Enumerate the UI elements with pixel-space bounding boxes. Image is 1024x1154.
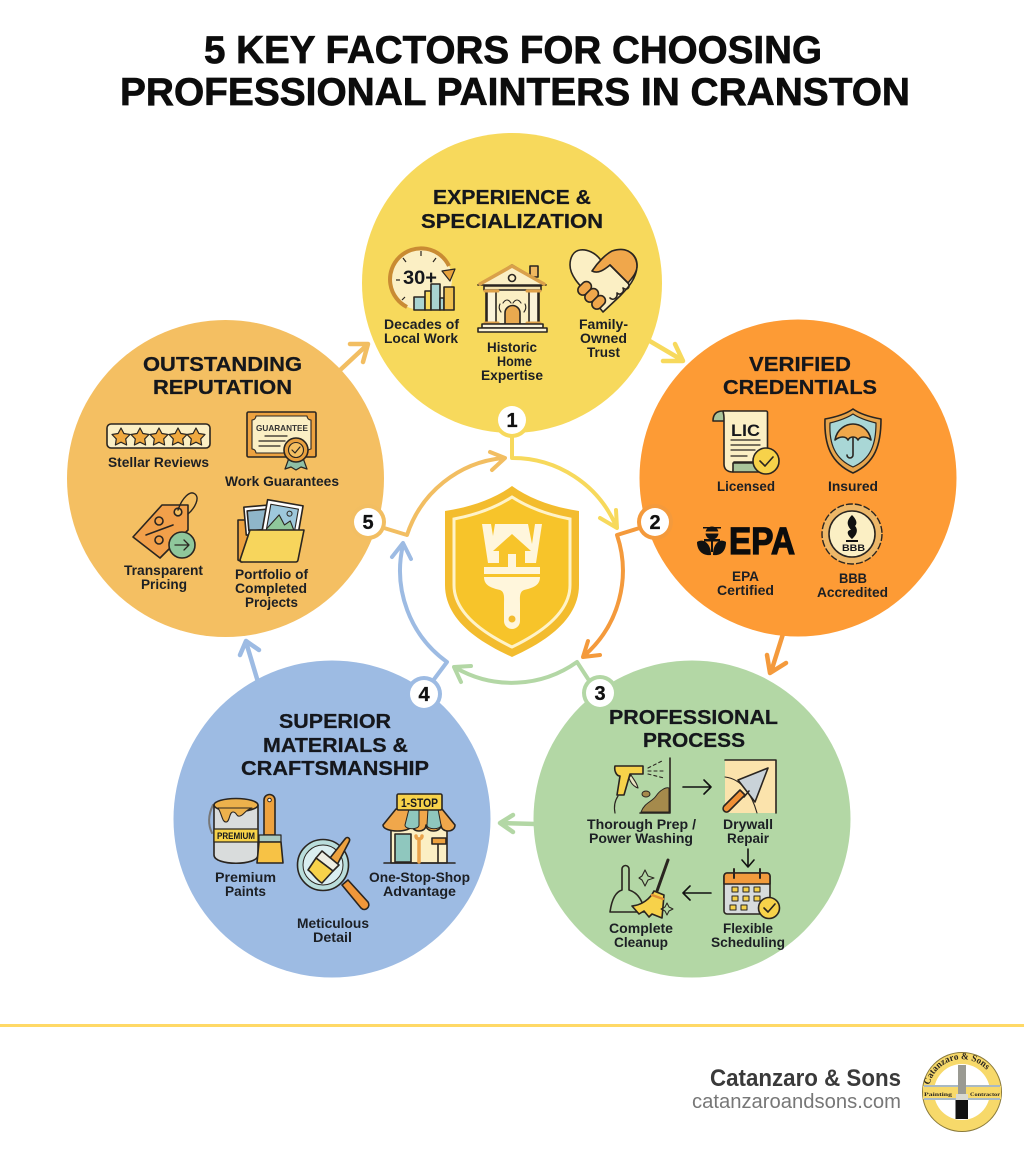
labels: materials items: Premium	[215, 870, 276, 885]
panel: experience and specialization	[362, 133, 662, 433]
heading: superior materials and craftsmanship: CRAFTSMANSHIP	[241, 758, 429, 780]
labels: reputation items: Pricing	[141, 577, 187, 592]
panel: verified credentials	[640, 320, 956, 636]
panel: superior materials and craftsmanship	[174, 660, 490, 978]
arrow: inner ring amber segment	[384, 452, 505, 535]
footer: company name and website: catanzaroandsons.com	[692, 1091, 901, 1113]
icon: one stop shop storefront	[383, 794, 455, 863]
labels: process items: Complete	[609, 921, 674, 936]
labels: credentials items: EPA	[732, 569, 759, 584]
arrow: drywall to scheduling	[742, 849, 754, 867]
icon: BBB seal	[822, 504, 882, 564]
badge: number 2: 2	[649, 512, 661, 534]
labels: process items: Cleanup	[614, 935, 668, 950]
badge: number 2	[637, 504, 673, 540]
badge: number 5	[350, 504, 386, 540]
icon: central shield with paintbrush and house	[445, 486, 579, 657]
icon: power washer and wall	[614, 758, 670, 813]
labels: experience items: Historic	[487, 340, 537, 355]
badge: number 3: 3	[594, 683, 606, 705]
arrow: step 5 to step 1	[338, 344, 368, 372]
icon: portfolio folder	[238, 500, 304, 562]
heading: superior materials and craftsmanship: SUPERIOR	[279, 711, 392, 733]
labels: experience items: Owned	[580, 331, 627, 346]
labels: reputation items: Portfolio of	[235, 567, 309, 582]
badge: number 1: 1	[506, 410, 518, 432]
arrow: step 3 to step 4	[500, 815, 536, 832]
labels: reputation items: Stellar Reviews	[108, 455, 209, 470]
labels: experience items: Trust	[587, 345, 620, 360]
icon: company logo: Catanzaro & Sons	[924, 1053, 990, 1084]
heading: experience and specialization	[421, 187, 603, 233]
heading: verified credentials	[723, 354, 877, 399]
footer: company name and website: Catanzaro & Sons	[710, 1065, 901, 1092]
labels: reputation items: Work Guarantees	[225, 474, 339, 489]
icon: EPA logo: EPA	[729, 521, 795, 563]
icon: EPA logo	[697, 521, 795, 563]
heading: outstanding reputation	[143, 354, 302, 399]
arrow: inner ring blue segment	[392, 543, 447, 682]
icon: one stop shop storefront: 1-STOP	[401, 796, 438, 810]
icon: historic home	[478, 265, 547, 332]
heading: professional process: PROCESS	[643, 730, 745, 752]
icon: handshake heart	[570, 250, 637, 312]
icon: guarantee certificate: GUARANTEE	[256, 423, 308, 433]
panel: outstanding reputation	[67, 320, 384, 637]
icon: magnifier with brush	[298, 838, 369, 909]
title: PROFESSIONAL PAINTERS IN CRANSTON	[120, 71, 910, 114]
icon: premium paint can and brush	[209, 794, 283, 863]
footer: company name and website	[692, 1065, 901, 1113]
labels: materials items	[215, 870, 470, 945]
icon: company logo: Painting	[924, 1092, 952, 1098]
heading: professional process	[609, 707, 778, 752]
heading: experience and specialization: EXPERIENCE &	[433, 187, 591, 209]
arrow: scheduling to cleanup	[683, 886, 711, 900]
icon: transparent pricing tag	[133, 493, 197, 558]
heading: outstanding reputation: REPUTATION	[153, 377, 292, 399]
icon: license document: LIC	[731, 421, 760, 440]
labels: reputation items: Transparent	[124, 563, 204, 578]
badge: number 4	[406, 676, 442, 712]
labels: experience items	[384, 317, 628, 383]
icon: BBB seal: BBB	[842, 543, 865, 554]
title: 5 KEY FACTORS FOR CHOOSING	[204, 29, 822, 72]
labels: reputation items: Projects	[245, 595, 298, 610]
heading: experience and specialization: SPECIALIZATION	[421, 211, 603, 233]
icon: license document	[713, 411, 779, 474]
badge: number 4: 4	[418, 684, 430, 706]
labels: process items: Power Washing	[589, 831, 693, 846]
labels: materials items: Paints	[225, 884, 266, 899]
arrow: inner ring yellow segment	[512, 433, 617, 528]
labels: credentials items: Insured	[828, 479, 878, 494]
labels: process items: Scheduling	[711, 935, 785, 950]
badge: number 5: 5	[362, 512, 374, 534]
labels: experience items: Decades of	[384, 317, 460, 332]
labels: materials items: Meticulous	[297, 916, 369, 931]
heading: outstanding reputation: OUTSTANDING	[143, 354, 302, 376]
labels: process items	[587, 817, 785, 950]
labels: materials items: Advantage	[383, 884, 457, 899]
arrow: step 4 to step 5	[240, 641, 259, 682]
heading: professional process: PROFESSIONAL	[609, 707, 778, 729]
labels: credentials items: Licensed	[717, 479, 775, 494]
icon: calendar	[724, 869, 780, 918]
arrow: step 1 to step 2	[648, 340, 683, 361]
arrow: prep to drywall	[683, 780, 711, 794]
labels: materials items: One-Stop-Shop	[369, 870, 470, 885]
arrow: inner ring green segment	[454, 662, 592, 685]
arrow: step 2 to step 3	[767, 634, 786, 673]
heading: verified credentials: CREDENTIALS	[723, 377, 877, 399]
panel: professional process	[534, 660, 850, 978]
labels: experience items: Local Work	[384, 331, 458, 346]
icon: 30 plus years clock and city	[390, 248, 455, 310]
labels: reputation items: Completed	[235, 581, 307, 596]
icon: dustpan and broom	[610, 860, 673, 918]
icon: 30 plus years clock and city: 30+	[403, 268, 437, 289]
labels: process items: Drywall	[723, 817, 773, 832]
labels: credentials items	[717, 479, 888, 600]
labels: credentials items: BBB	[839, 571, 867, 586]
heading: superior materials and craftsmanship	[241, 711, 429, 780]
icon: five star rating	[107, 424, 210, 448]
footer divider	[0, 1024, 1024, 1027]
labels: experience items: Expertise	[481, 368, 543, 383]
icon: company logo: Contractor	[970, 1092, 1001, 1098]
heading: verified credentials: VERIFIED	[749, 354, 851, 376]
icon: guarantee certificate	[247, 412, 316, 470]
labels: process items: Flexible	[723, 921, 773, 936]
badge: number 1	[494, 402, 530, 438]
labels: materials items: Detail	[313, 930, 352, 945]
icon: company logo	[922, 1052, 1002, 1132]
arrow: inner ring orange segment	[583, 526, 646, 657]
labels: credentials items: Accredited	[817, 585, 888, 600]
badge: number 3	[582, 675, 618, 711]
labels: reputation items	[108, 455, 339, 610]
labels: process items: Thorough Prep /	[587, 817, 696, 832]
icon: insurance shield	[825, 409, 881, 473]
icon: drywall trowel	[723, 760, 776, 813]
labels: process items: Repair	[727, 831, 770, 846]
heading: superior materials and craftsmanship: MATERIALS &	[263, 735, 408, 757]
labels: credentials items: Certified	[717, 583, 774, 598]
labels: experience items: Home	[497, 354, 532, 369]
title	[120, 29, 910, 114]
icon: premium paint can and brush: PREMIUM	[217, 831, 255, 841]
labels: experience items: Family-	[579, 317, 628, 332]
